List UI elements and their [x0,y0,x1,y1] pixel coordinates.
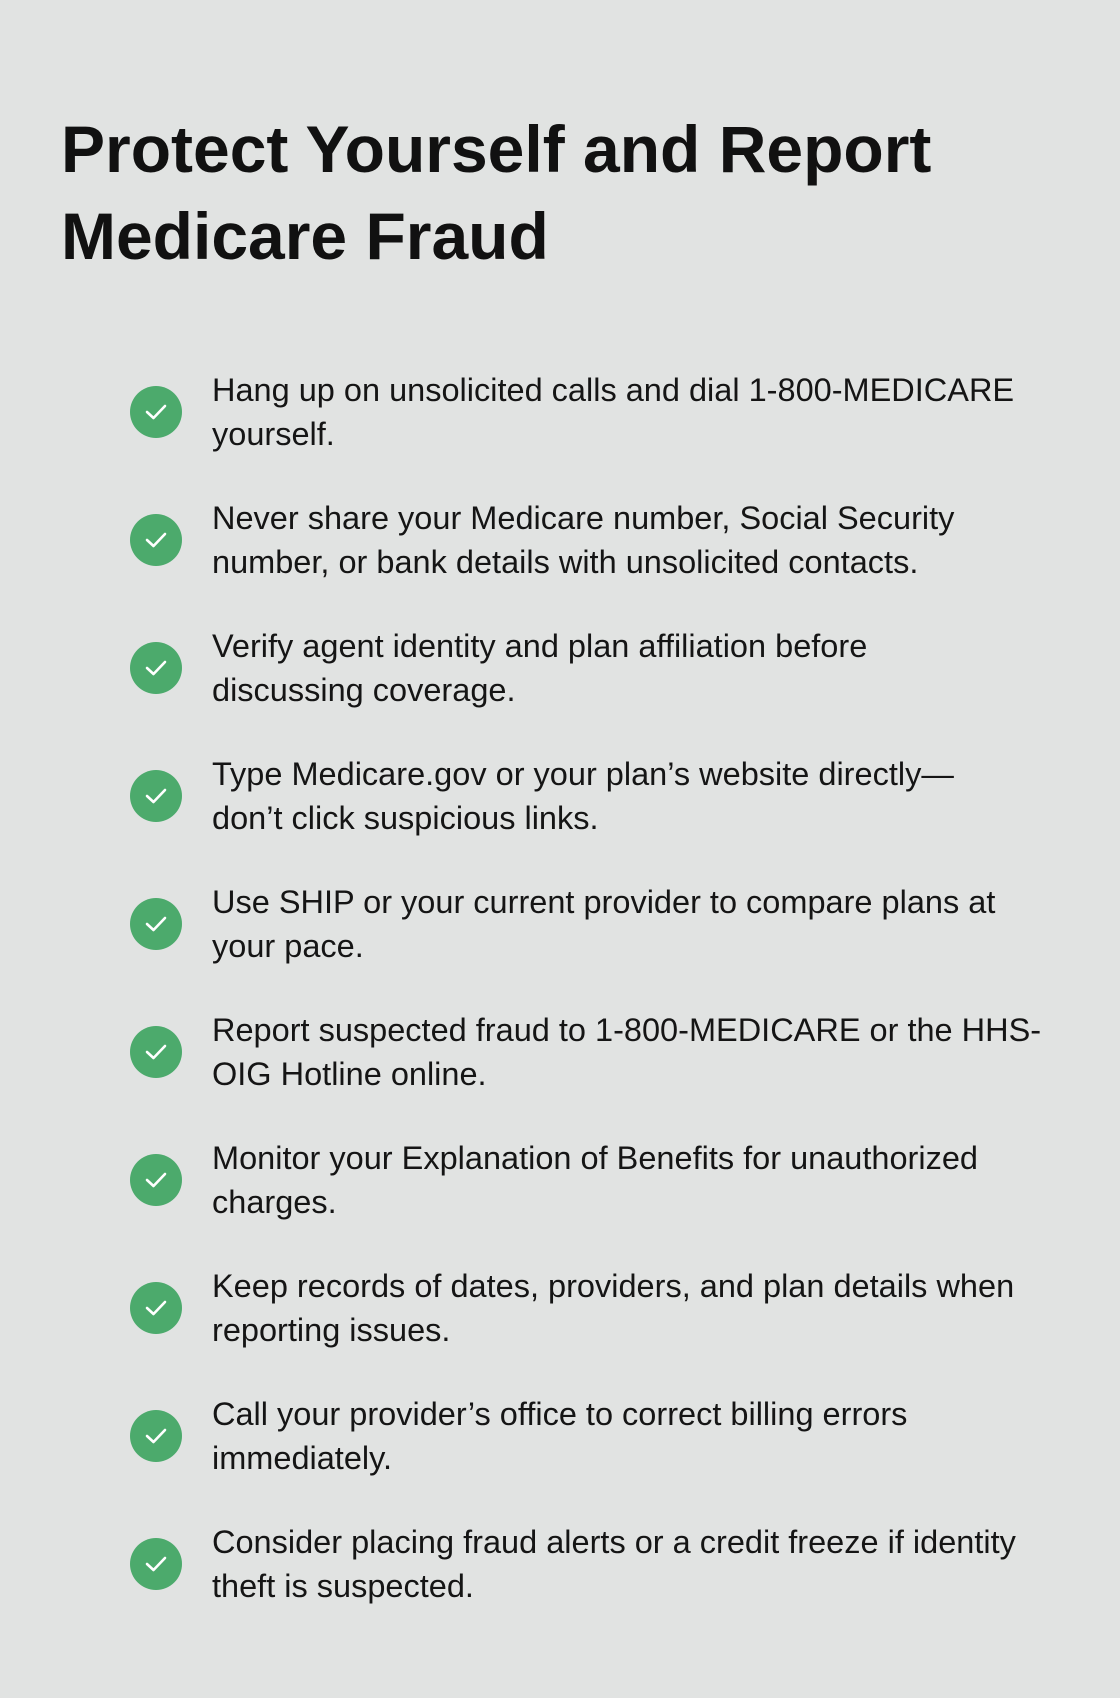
text [212,372,1014,452]
text [212,1396,907,1476]
icon: check [130,898,182,950]
text: Report suspected fraud to 1-800-MEDICARE or the HHS- [212,1012,1041,1048]
icon: check [130,514,182,566]
text: Never share your Medicare number, Social Security [212,500,954,536]
text: Consider placing fraud alerts or a credit freeze if identity [212,1524,1016,1560]
text: Type Medicare.gov or your plan’s website directly— [212,756,954,792]
text: Keep records of dates, providers, and plan details when [212,1268,1014,1304]
icon: check [130,1410,182,1462]
text: charges. [212,1184,337,1220]
list item 7 [130,1140,978,1220]
text: Verify agent identity and plan affiliation before [212,628,867,664]
title [61,112,931,273]
icon: check [130,1538,182,1590]
icon: check [130,642,182,694]
text [212,884,996,964]
text: Call your provider’s office to correct billing errors [212,1396,907,1432]
text: Monitor your Explanation of Benefits for unauthorized [212,1140,978,1176]
title: Medicare Fraud [61,199,549,273]
text [212,500,954,580]
text: OIG Hotline online. [212,1056,487,1092]
icon: check [130,770,182,822]
list item 8 [130,1268,1014,1348]
icon: check [130,386,182,438]
text [212,1012,1041,1092]
text: Hang up on unsolicited calls and dial 1-800-MEDICARE [212,372,1014,408]
icon: check [130,1282,182,1334]
text: theft is suspected. [212,1568,474,1604]
text: your pace. [212,928,364,964]
list item 9 [130,1396,907,1476]
text: yourself. [212,416,335,452]
list item 6 [130,1012,1041,1092]
text [212,756,954,836]
text [212,1140,978,1220]
icon: check [130,1154,182,1206]
text: don’t click suspicious links. [212,800,599,836]
list item 5 [130,884,996,964]
text [212,628,867,708]
list item 1 [130,372,1014,452]
text: discussing coverage. [212,672,516,708]
text: Use SHIP or your current provider to compare plans at [212,884,995,920]
list item 3 [130,628,867,708]
text: reporting issues. [212,1312,450,1348]
icon: check [130,1026,182,1078]
list item 2 [130,500,954,580]
text [212,1524,1016,1604]
text [212,1268,1014,1348]
list item 4 [130,756,954,836]
text: number, or bank details with unsolicited contacts. [212,544,918,580]
text: immediately. [212,1440,392,1476]
list item 10 [130,1524,1016,1604]
title: Protect Yourself and Report [61,112,931,186]
